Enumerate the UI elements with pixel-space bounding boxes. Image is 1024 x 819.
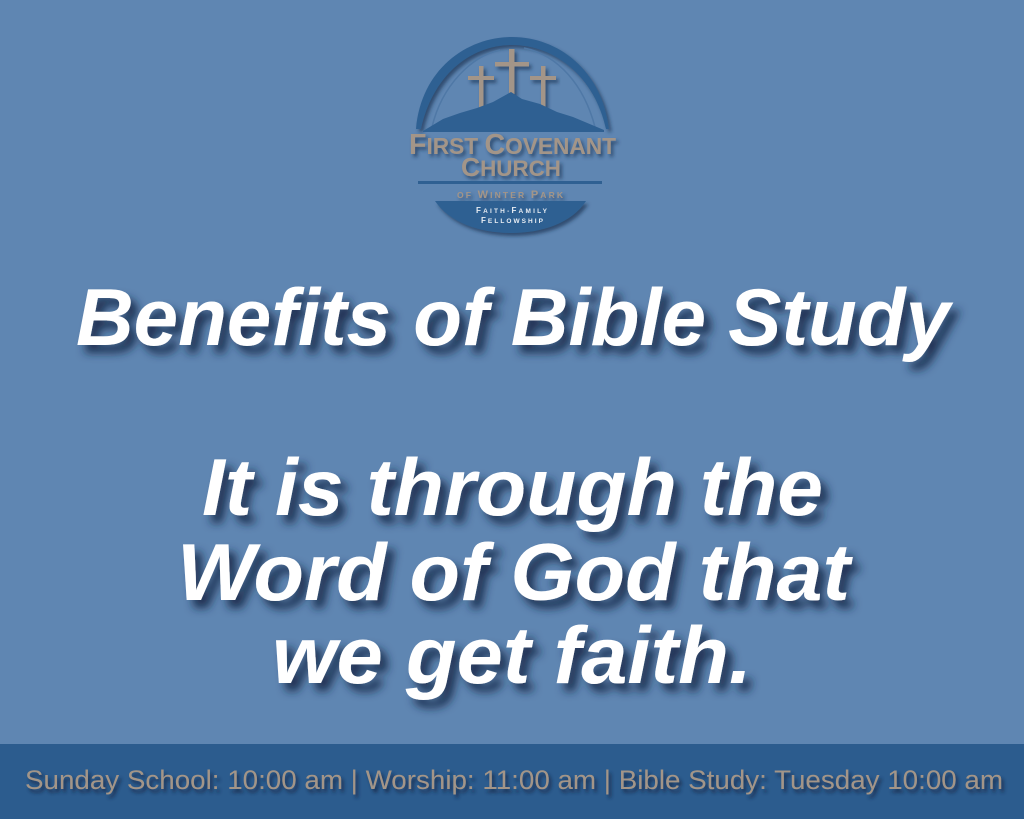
icon: inner arc (432, 48, 595, 127)
message text: Word of God that (177, 528, 853, 618)
logo: First Covenant Church (409, 37, 616, 233)
title: Benefits of Bible Study (76, 273, 954, 363)
message text: It is through the (202, 443, 823, 533)
logo rule (418, 181, 602, 184)
logo tagline (476, 206, 548, 225)
message text (177, 443, 853, 701)
footer schedule text: Sunday School: 10:00 am | Worship: 11:00 am | Bible Study: Tuesday 10:00 am (25, 765, 1003, 795)
logo heading: Church: CHURCH (461, 152, 561, 182)
icon: three crosses (468, 49, 556, 108)
icon: arch (416, 37, 609, 129)
footer band (0, 744, 1024, 819)
logo tagline: F AITH- F AMILY (476, 206, 548, 215)
message text: we get faith. (272, 611, 752, 701)
logo heading: First Covenant: FIRST COVENANT (409, 129, 616, 161)
logo tagline: F ELLOWSHIP (481, 216, 544, 225)
icon: hill (423, 92, 604, 132)
logo subheading: of Winter Park: OF W INTER P ARK (457, 189, 564, 201)
logo banner (435, 201, 586, 233)
